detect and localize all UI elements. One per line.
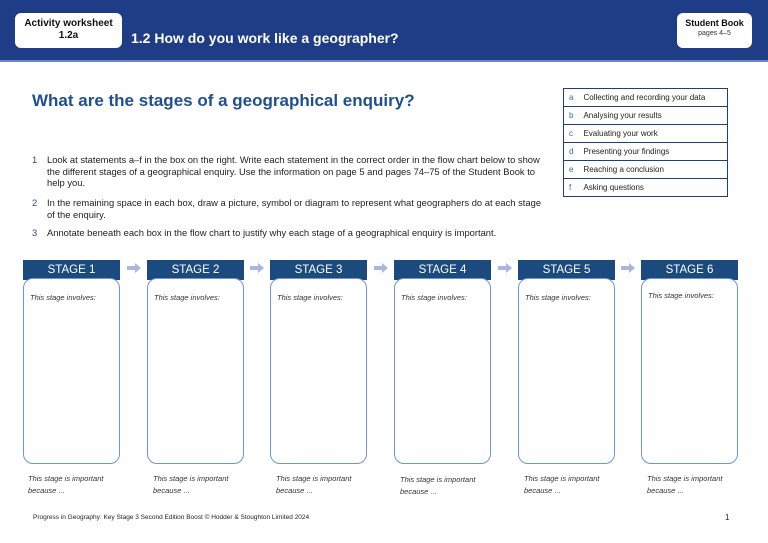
stage 6 — [641, 260, 738, 494]
stage 5 — [518, 260, 615, 494]
stage 4 — [394, 260, 491, 496]
worksheet label: 1.2a — [59, 30, 78, 41]
stage 3: This stage involves: — [277, 293, 343, 302]
statements table: d — [569, 147, 573, 156]
stage 4: This stage is important because ... — [400, 475, 475, 496]
stage 5: This stage involves: — [525, 293, 591, 302]
student book label: Student Book — [685, 18, 744, 28]
stage 6: STAGE 6 — [666, 264, 713, 276]
stage 3 — [270, 260, 367, 494]
stage 1 — [23, 260, 120, 494]
statements table: Presenting your findings — [583, 147, 669, 156]
stage 6: This stage is important because ... — [647, 474, 722, 494]
stage 5: This stage is important because ... — [524, 474, 599, 494]
statements table: a — [569, 93, 573, 102]
instruction 2: 2 — [32, 197, 37, 208]
stage 2: This stage involves: — [154, 293, 220, 302]
page number: 1 — [725, 513, 729, 522]
arrow — [250, 263, 264, 273]
stage 2: This stage is important because ... — [153, 474, 228, 494]
stage 2: STAGE 2 — [172, 264, 219, 276]
statements table: b — [569, 111, 573, 120]
student book label: pages 4–5 — [698, 30, 731, 37]
statements table: e — [569, 165, 573, 174]
statements table: Collecting and recording your data — [583, 93, 705, 102]
instruction 3: 3 — [32, 227, 37, 238]
header title: 1.2 How do you work like a geographer? — [131, 30, 399, 46]
statements table: Asking questions — [583, 183, 644, 192]
header bar — [0, 0, 768, 62]
stage 5: STAGE 5 — [543, 264, 590, 276]
stage 6: This stage involves: — [648, 291, 714, 300]
instruction 2: In the remaining space in each box, draw a picture, symbol or diagram to represent what geographers do at each stage of the enquiry. — [47, 197, 541, 220]
statements table: Analysing your results — [583, 111, 662, 120]
stage 3: This stage is important because ... — [276, 474, 351, 494]
arrow — [498, 263, 512, 273]
statements table: f — [569, 183, 571, 192]
arrow — [127, 263, 141, 273]
stage 1: This stage is important because ... — [28, 474, 103, 494]
main heading: What are the stages of a geographical enquiry? — [32, 91, 415, 110]
stage 1: This stage involves: — [30, 293, 96, 302]
stage 4: This stage involves: — [401, 293, 467, 302]
instruction 3: Annotate beneath each box in the flow chart to justify why each stage of a geographical enquiry is important. — [47, 227, 496, 238]
instruction 1: Look at statements a–f in the box on the right. Write each statement in the correct order in the flow chart below to show the different stages of a geographical enquiry. Use the information on page 5 and pages 74–75 of the Student Book to help you. — [47, 154, 540, 188]
footer: Progress in Geography: Key Stage 3 Second Edition Boost © Hodder & Stoughton Limited 2024 — [33, 514, 309, 521]
statements table — [563, 88, 728, 197]
statements table: Reaching a conclusion — [583, 165, 664, 174]
worksheet label — [15, 13, 122, 48]
instruction 1: 1 — [32, 154, 37, 165]
student book label — [677, 13, 752, 48]
stage 4: STAGE 4 — [419, 264, 466, 276]
worksheet label: Activity worksheet — [24, 18, 113, 29]
stage 1: STAGE 1 — [48, 264, 95, 276]
stage 2 — [147, 260, 244, 494]
arrow — [374, 263, 388, 273]
stage 3: STAGE 3 — [295, 264, 342, 276]
arrow — [621, 263, 635, 273]
statements table: c — [569, 129, 573, 138]
statements table: Evaluating your work — [583, 129, 658, 138]
